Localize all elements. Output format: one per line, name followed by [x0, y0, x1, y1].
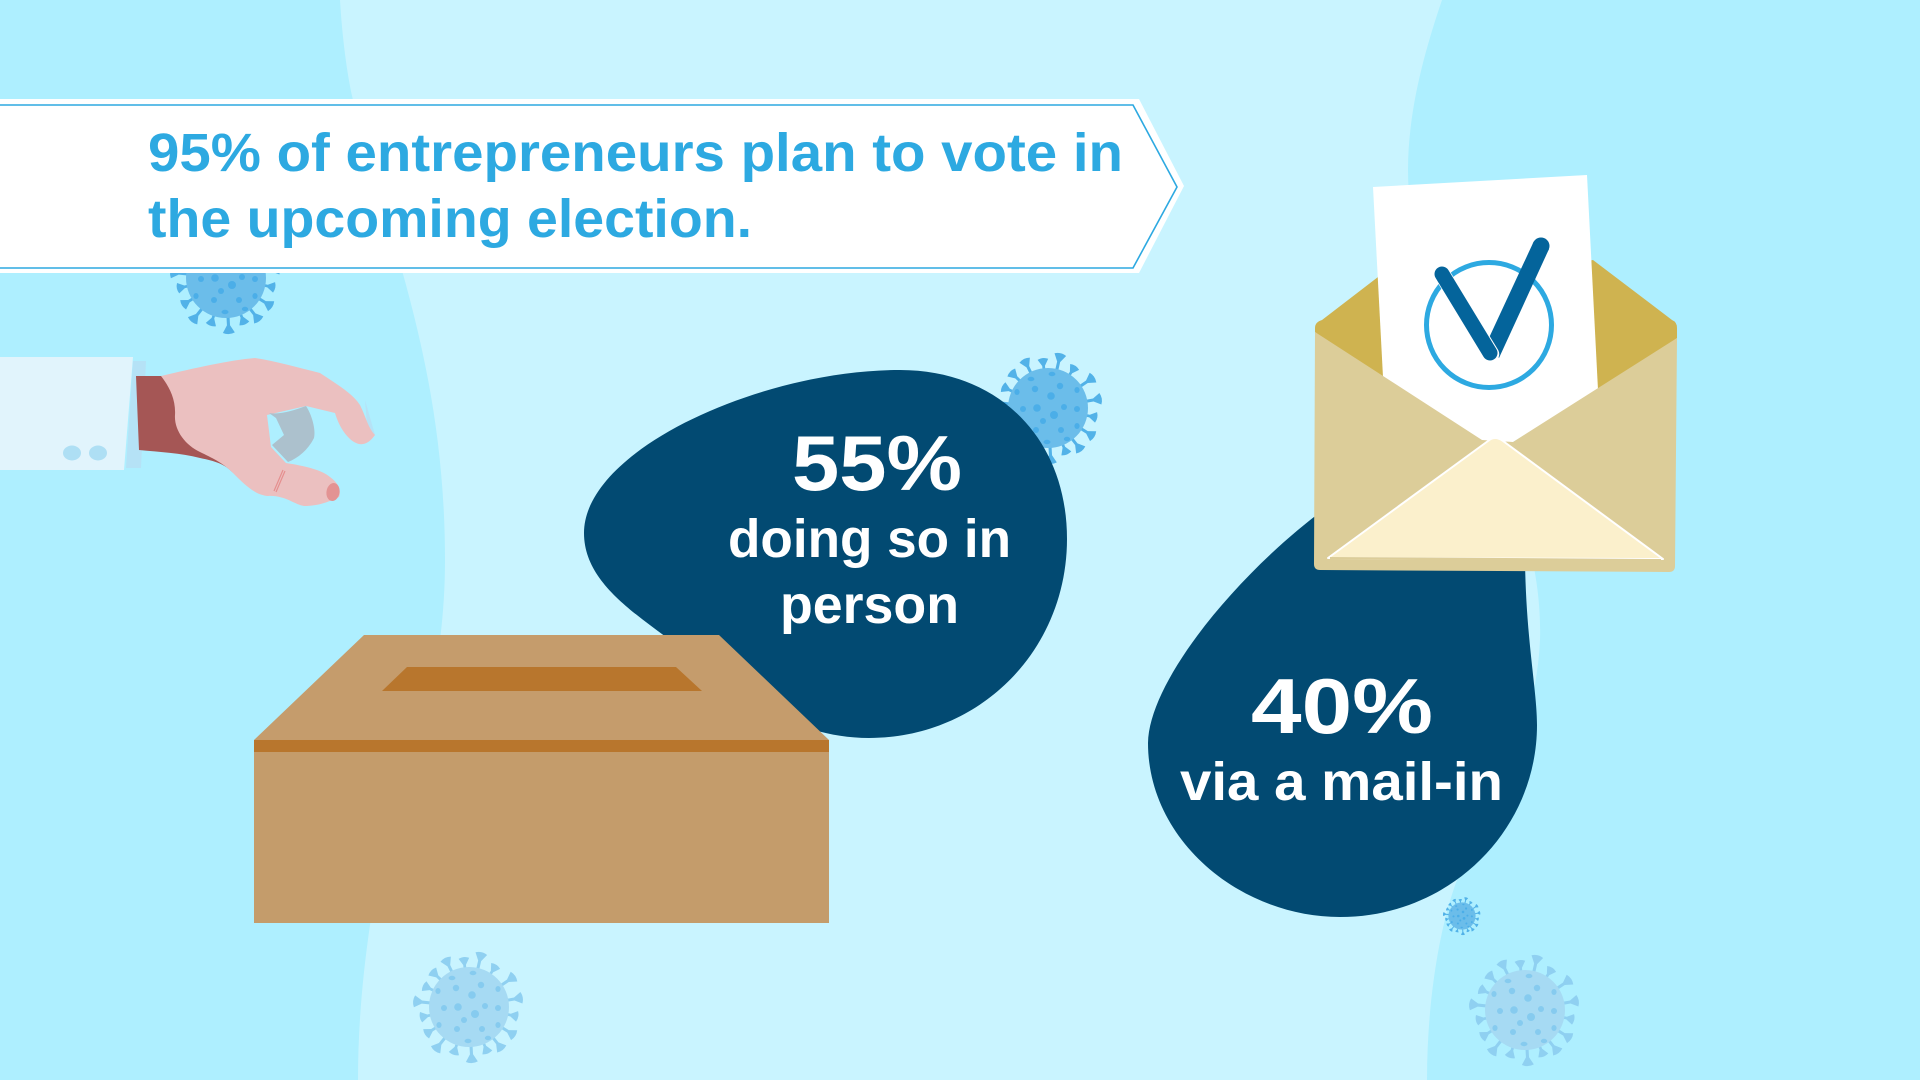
- headline banner: [0, 99, 1184, 273]
- fingertip shadow: [365, 400, 375, 438]
- check mark: [1442, 238, 1550, 358]
- hand: [161, 358, 375, 506]
- fingernail: [325, 482, 341, 502]
- stat: 40%: 40%: [1251, 662, 1433, 750]
- box rim: [254, 740, 829, 752]
- envelope front flap: [1328, 438, 1663, 559]
- virus behind banner: [169, 222, 281, 334]
- pale virus bottom right: [1468, 954, 1580, 1066]
- ballot slot: [382, 667, 702, 691]
- virus beside in-person blob: [991, 352, 1103, 464]
- headline text: the upcoming election.: [148, 189, 752, 249]
- ballot paper: [1373, 175, 1598, 442]
- shirt cuff: [0, 357, 146, 470]
- label: doing so in person: doing so in: [728, 509, 1011, 569]
- icon: envelope with ballot: [1314, 175, 1677, 572]
- check circle: [1426, 262, 1552, 388]
- envelope back flap: [1315, 260, 1677, 400]
- background: right wave: [1408, 0, 1920, 1080]
- label: doing so in person: person: [780, 575, 959, 635]
- pale virus bottom left: [412, 951, 524, 1063]
- jacket sleeve: [136, 376, 233, 473]
- callout blob: in person: [584, 370, 1067, 738]
- small virus: [1443, 897, 1481, 935]
- grey ballot: [269, 406, 315, 462]
- headline text: 95% of entrepreneurs plan to vote in: [148, 123, 1123, 183]
- icon: hand dropping ballot: [0, 357, 375, 506]
- ballot box: [254, 635, 829, 923]
- label: via a mail-in: via a mail-in: [1180, 752, 1503, 812]
- stat: 55%: 55%: [792, 419, 962, 507]
- envelope body: [1314, 332, 1677, 572]
- box lid: [254, 635, 829, 740]
- knuckle creases: [274, 470, 285, 492]
- callout blob: mail-in: [1148, 505, 1537, 917]
- box front: [254, 752, 829, 923]
- background: left wave: [0, 0, 445, 1080]
